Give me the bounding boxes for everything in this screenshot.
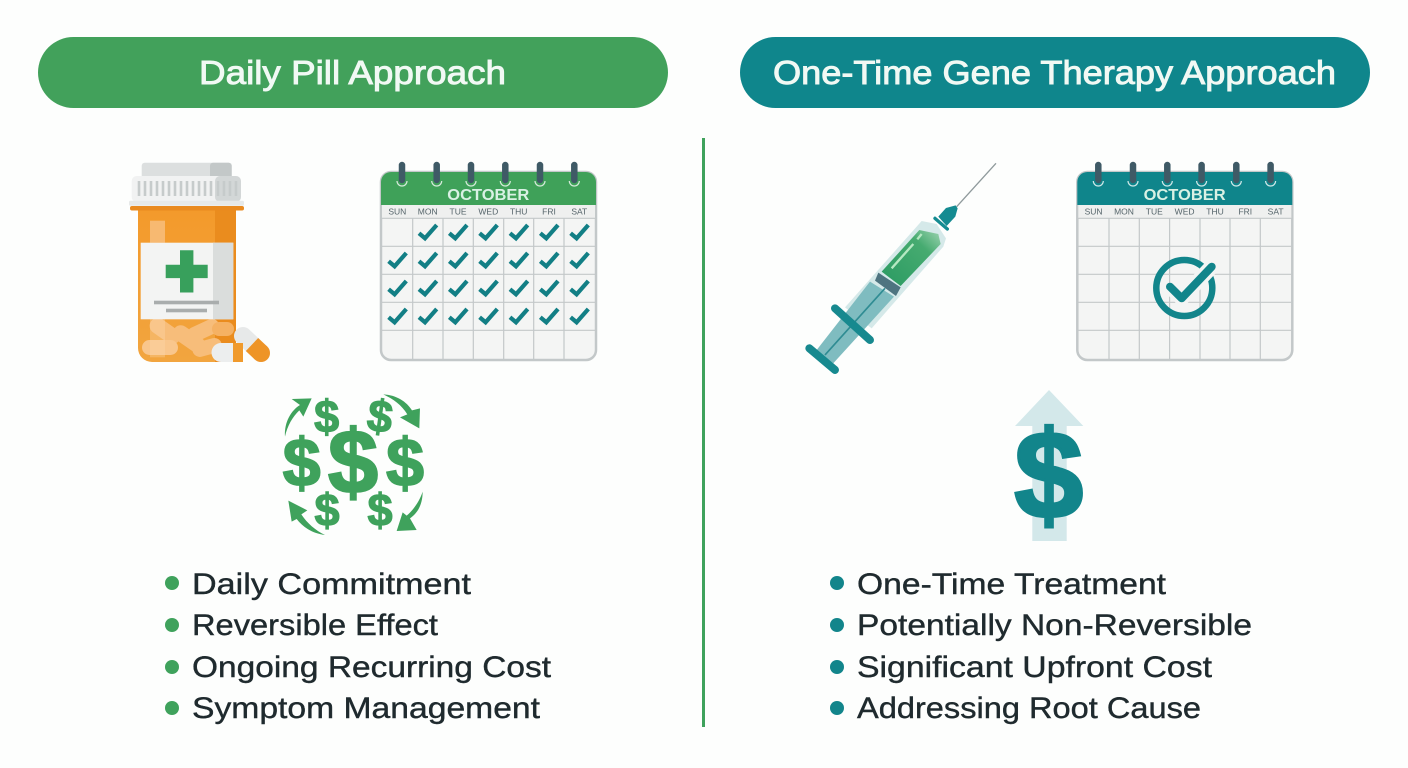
bullet list: daily pill traits	[165, 568, 552, 725]
icon: calendar with single check: MON	[1114, 207, 1134, 217]
icon: recurring dollar costs: $	[367, 484, 393, 536]
bullet list: gene therapy traits: Significant Upfront Cost	[857, 651, 1213, 684]
heading: one-time gene therapy approach: One-Time Gene Therapy Approach	[773, 54, 1336, 91]
bullet list: gene therapy traits: One-Time Treatment	[857, 568, 1167, 601]
icon: upfront cost arrow: $	[1014, 407, 1083, 545]
icon: recurring dollar costs: $	[364, 389, 396, 443]
heading: one-time gene therapy approach	[740, 37, 1370, 108]
icon: pill bottle	[129, 163, 270, 362]
bullet list: daily pill traits: Daily Commitment	[192, 568, 472, 601]
icon: calendar with daily checks: THU	[510, 207, 527, 217]
icon: recurring dollar costs: $	[314, 484, 340, 536]
icon: calendar with daily checks: SUN	[388, 207, 406, 217]
icon: circled check	[1156, 260, 1212, 316]
panel: daily pill approach	[38, 37, 668, 725]
heading: daily pill approach: Daily Pill Approach	[199, 54, 506, 91]
icon: recurring dollar costs: $	[314, 391, 339, 442]
icon: calendar with daily checks: OCTOBER	[447, 187, 530, 204]
icon: calendar with single check: SUN	[1085, 207, 1103, 217]
icon: calendar with single check: SAT	[1268, 207, 1284, 217]
icon: syringe	[809, 163, 996, 370]
bullet list: gene therapy traits: Addressing Root Cause	[857, 692, 1201, 725]
panel: one-time gene therapy approach	[740, 37, 1370, 725]
icon: calendar with single check: OCTOBER	[1144, 187, 1226, 204]
icon: calendar with daily checks: SAT	[571, 207, 587, 217]
icon: calendar with daily checks	[381, 165, 596, 360]
icon: calendar with single check	[1077, 165, 1292, 360]
bullet list: daily pill traits: Symptom Management	[192, 692, 541, 725]
icon: calendar with single check: WED	[1175, 207, 1195, 217]
bullet list: daily pill traits: Reversible Effect	[192, 609, 439, 642]
icon: circular arrows	[285, 394, 423, 535]
icon: recurring dollar costs: $	[386, 425, 424, 501]
icon: calendar with daily checks: WED	[478, 207, 498, 217]
heading: daily pill approach	[38, 37, 668, 108]
icon: calendar with single check: TUE	[1146, 207, 1163, 217]
icon: calendar with daily checks: FRI	[542, 207, 556, 217]
icon: recurring dollar costs: $	[328, 413, 378, 513]
icon: recurring dollar costs	[283, 389, 424, 536]
bullet list: daily pill traits: Ongoing Recurring Cost	[192, 651, 552, 684]
icon: calendar with daily checks: TUE	[450, 207, 467, 217]
icon: recurring dollar costs: $	[283, 425, 321, 501]
icon: calendar with single check: THU	[1206, 207, 1224, 217]
bullet list: gene therapy traits	[830, 568, 1252, 725]
icon: loose capsules	[212, 336, 270, 362]
bullet list: gene therapy traits: Potentially Non-Reversible	[857, 609, 1252, 642]
checkmarks	[389, 225, 588, 322]
icon: calendar with single check: FRI	[1238, 207, 1252, 217]
icon: calendar with daily checks: MON	[418, 207, 438, 217]
